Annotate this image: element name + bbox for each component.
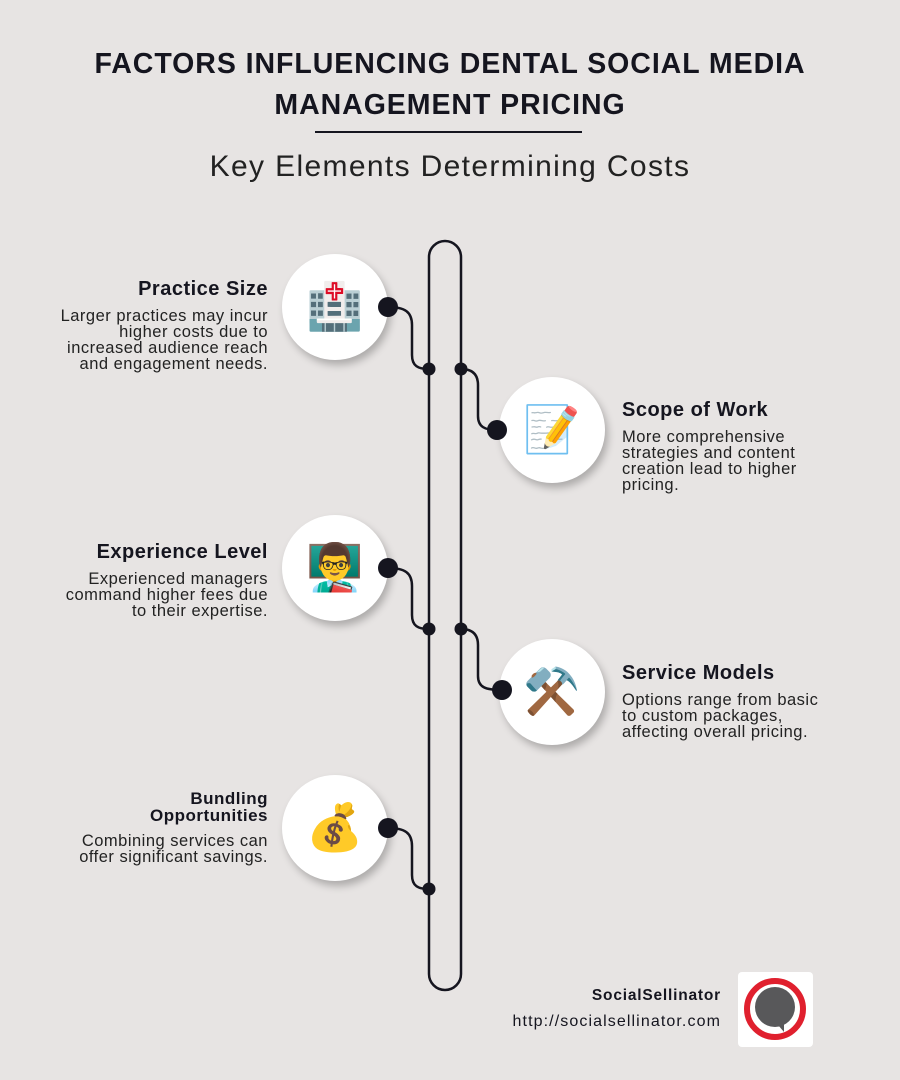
title underline: [315, 131, 582, 133]
panel: practice size: higher costs due to: [119, 323, 268, 341]
panel: practice size: increased audience reach: [67, 339, 268, 357]
panel: service models: affecting overall pricing.: [622, 723, 808, 741]
panel: scope of work: Scope of Work: [622, 399, 768, 421]
panel: service models: [622, 662, 818, 741]
title: FACTORS INFLUENCING DENTAL SOCIAL MEDIA: [94, 48, 806, 80]
panel: scope of work: pricing.: [622, 476, 679, 494]
icon: memo: 📝: [523, 403, 581, 457]
panel: experience level: [66, 541, 268, 620]
panel: service models: Options range from basic: [622, 691, 818, 709]
panel: practice size: Larger practices may incur: [61, 307, 268, 325]
icon: money bag: 💰: [306, 801, 364, 855]
panel: bundling: Opportunities: [150, 806, 268, 825]
title: [94, 48, 806, 121]
panel: experience level: Experience Level: [97, 541, 268, 563]
footer brand text: SocialSellinator: [592, 987, 721, 1004]
panel: experience level: to their expertise.: [132, 602, 268, 620]
panel: scope of work: creation lead to higher: [622, 460, 797, 478]
icon: money bag: [282, 775, 388, 881]
icon: memo: [499, 377, 605, 483]
panel: bundling: [79, 789, 268, 866]
panel: practice size: and engagement needs.: [80, 355, 268, 373]
footer brand text: [513, 987, 721, 1030]
panel: service models: Service Models: [622, 662, 775, 684]
panel: scope of work: More comprehensive: [622, 428, 785, 446]
panel: experience level: command higher fees due: [66, 586, 268, 604]
subtitle: Key Elements Determining Costs: [210, 150, 690, 183]
logo: [738, 972, 813, 1047]
panel: scope of work: strategies and content: [622, 444, 795, 462]
title: MANAGEMENT PRICING: [274, 89, 626, 121]
panel: experience level: Experienced managers: [88, 570, 268, 588]
icon: hospital: [282, 254, 388, 360]
panel: bundling: Combining services can: [82, 832, 268, 850]
panel: practice size: [61, 278, 268, 373]
panel: bundling: offer significant savings.: [79, 848, 268, 866]
icon: teacher: [282, 515, 388, 621]
icon: tools: [499, 639, 605, 745]
panel: service models: to custom packages,: [622, 707, 783, 725]
panel: scope of work: [622, 399, 797, 494]
panel: practice size: Practice Size: [138, 278, 268, 300]
panel: bundling: Bundling: [190, 789, 268, 808]
icon: teacher: 👨‍🏫: [306, 541, 364, 595]
icon: hospital: 🏥: [306, 280, 364, 334]
icon: tools: ⚒️: [523, 665, 581, 719]
footer brand text: http://socialsellinator.com: [513, 1013, 721, 1030]
